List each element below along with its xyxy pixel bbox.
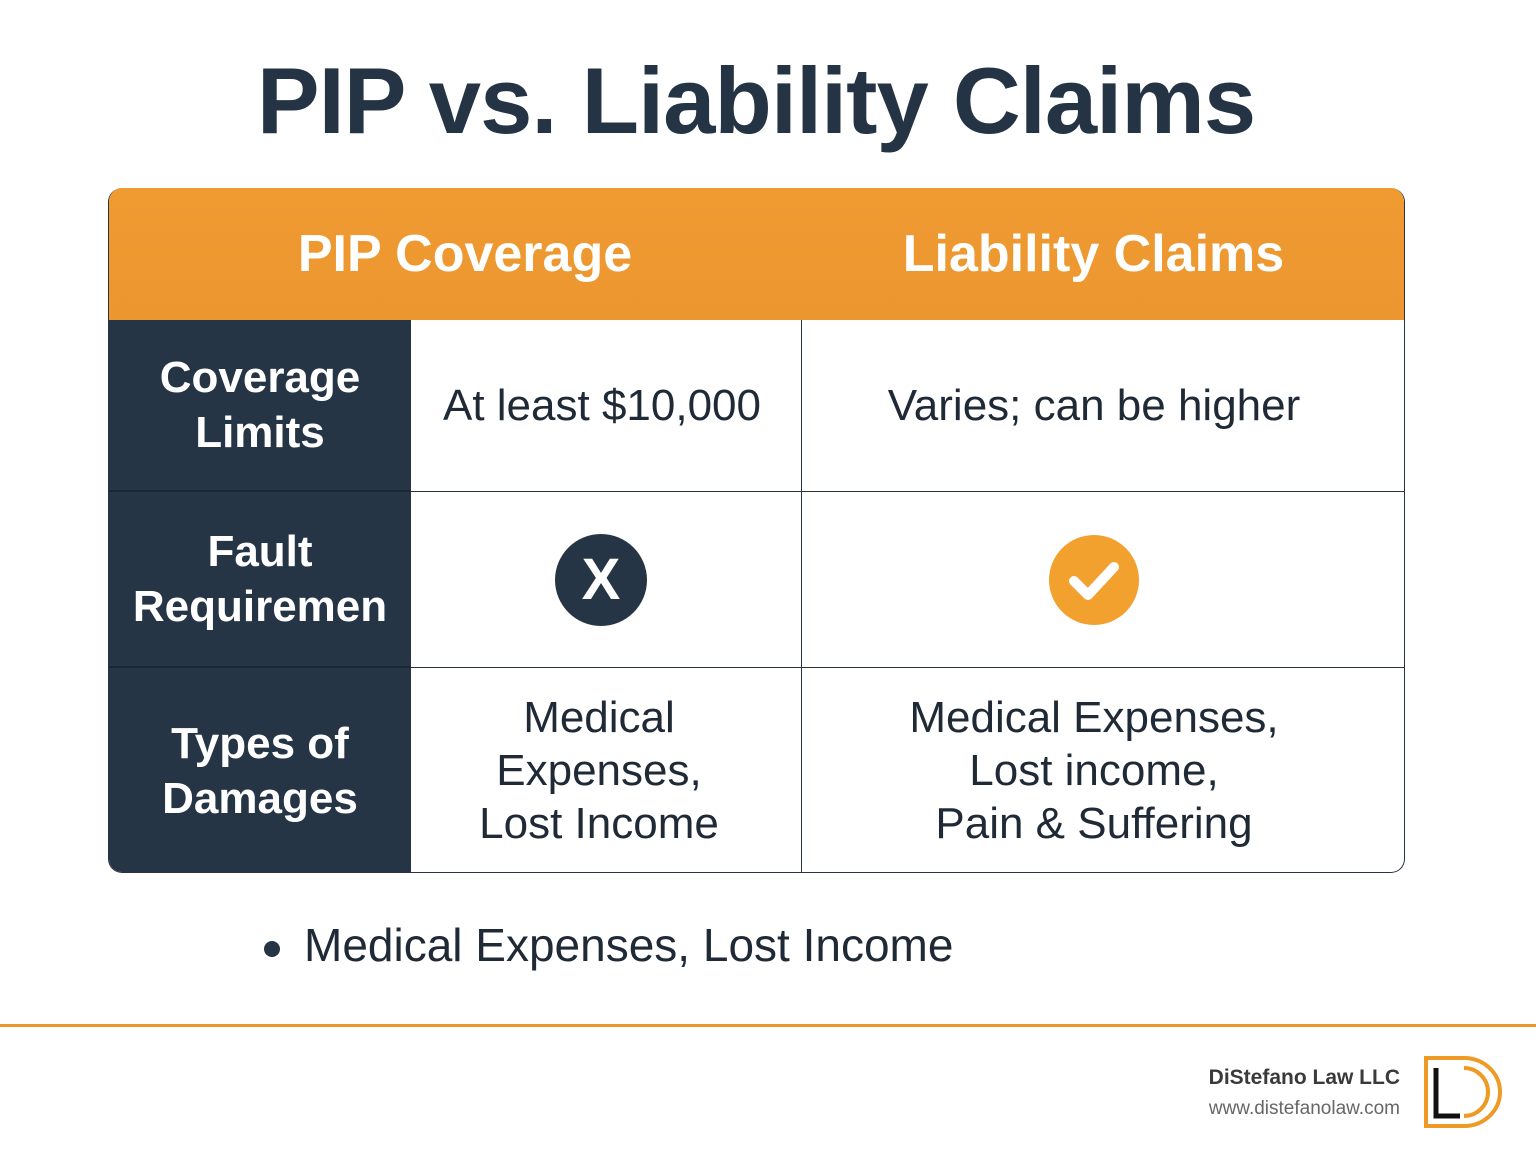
icon: X — [411, 492, 802, 668]
cell: liability damages: Pain & Suffering — [935, 799, 1253, 848]
header background — [109, 188, 1406, 320]
title: PIP vs. Liability Claims — [257, 48, 1255, 153]
bullet note: Medical Expenses, Lost Income — [304, 919, 953, 971]
row label: Types of Damages: Types of — [171, 718, 349, 768]
footer company name: DiStefano Law LLC — [1209, 1066, 1400, 1089]
row label: Types of Damages: Damages — [162, 774, 358, 822]
cell: PIP damages: Lost Income — [479, 799, 719, 848]
cell: PIP damages: Medical — [523, 693, 675, 742]
row label: Fault Requirement — [109, 492, 411, 668]
cell: liability damages — [909, 693, 1279, 848]
logo — [1424, 1056, 1502, 1128]
header: PIP Coverage: PIP Coverage — [298, 225, 632, 283]
comparison table — [108, 188, 1405, 873]
cell: PIP damages — [411, 668, 802, 873]
row label: Coverage Limits: Limits — [195, 408, 325, 457]
icon: X: X — [582, 546, 620, 612]
footer company name: www.distefanolaw.com — [1209, 1098, 1400, 1119]
row label: Fault Requirement: Fault — [207, 527, 313, 576]
cell: liability coverage limit — [802, 320, 1406, 492]
header: Liability Claims: Liability Claims — [903, 225, 1284, 283]
row label: Fault Requirement: Requiremen — [133, 582, 387, 631]
row label: Coverage Limits: Coverage — [160, 353, 360, 402]
cell: PIP coverage limit — [411, 320, 802, 492]
cell: liability damages: Lost income, — [969, 746, 1219, 795]
footer company name — [1208, 1066, 1400, 1119]
cell: liability damages: Medical Expenses, — [909, 693, 1279, 742]
row label: Types of Damages — [109, 668, 411, 873]
row label: Coverage Limits — [109, 320, 411, 492]
cell: liability coverage limit: Varies; can be higher — [888, 381, 1300, 430]
cell: PIP coverage limit: At least $10,000 — [443, 381, 761, 430]
cell: PIP damages: Expenses, — [496, 746, 702, 795]
icon: check — [802, 492, 1406, 668]
